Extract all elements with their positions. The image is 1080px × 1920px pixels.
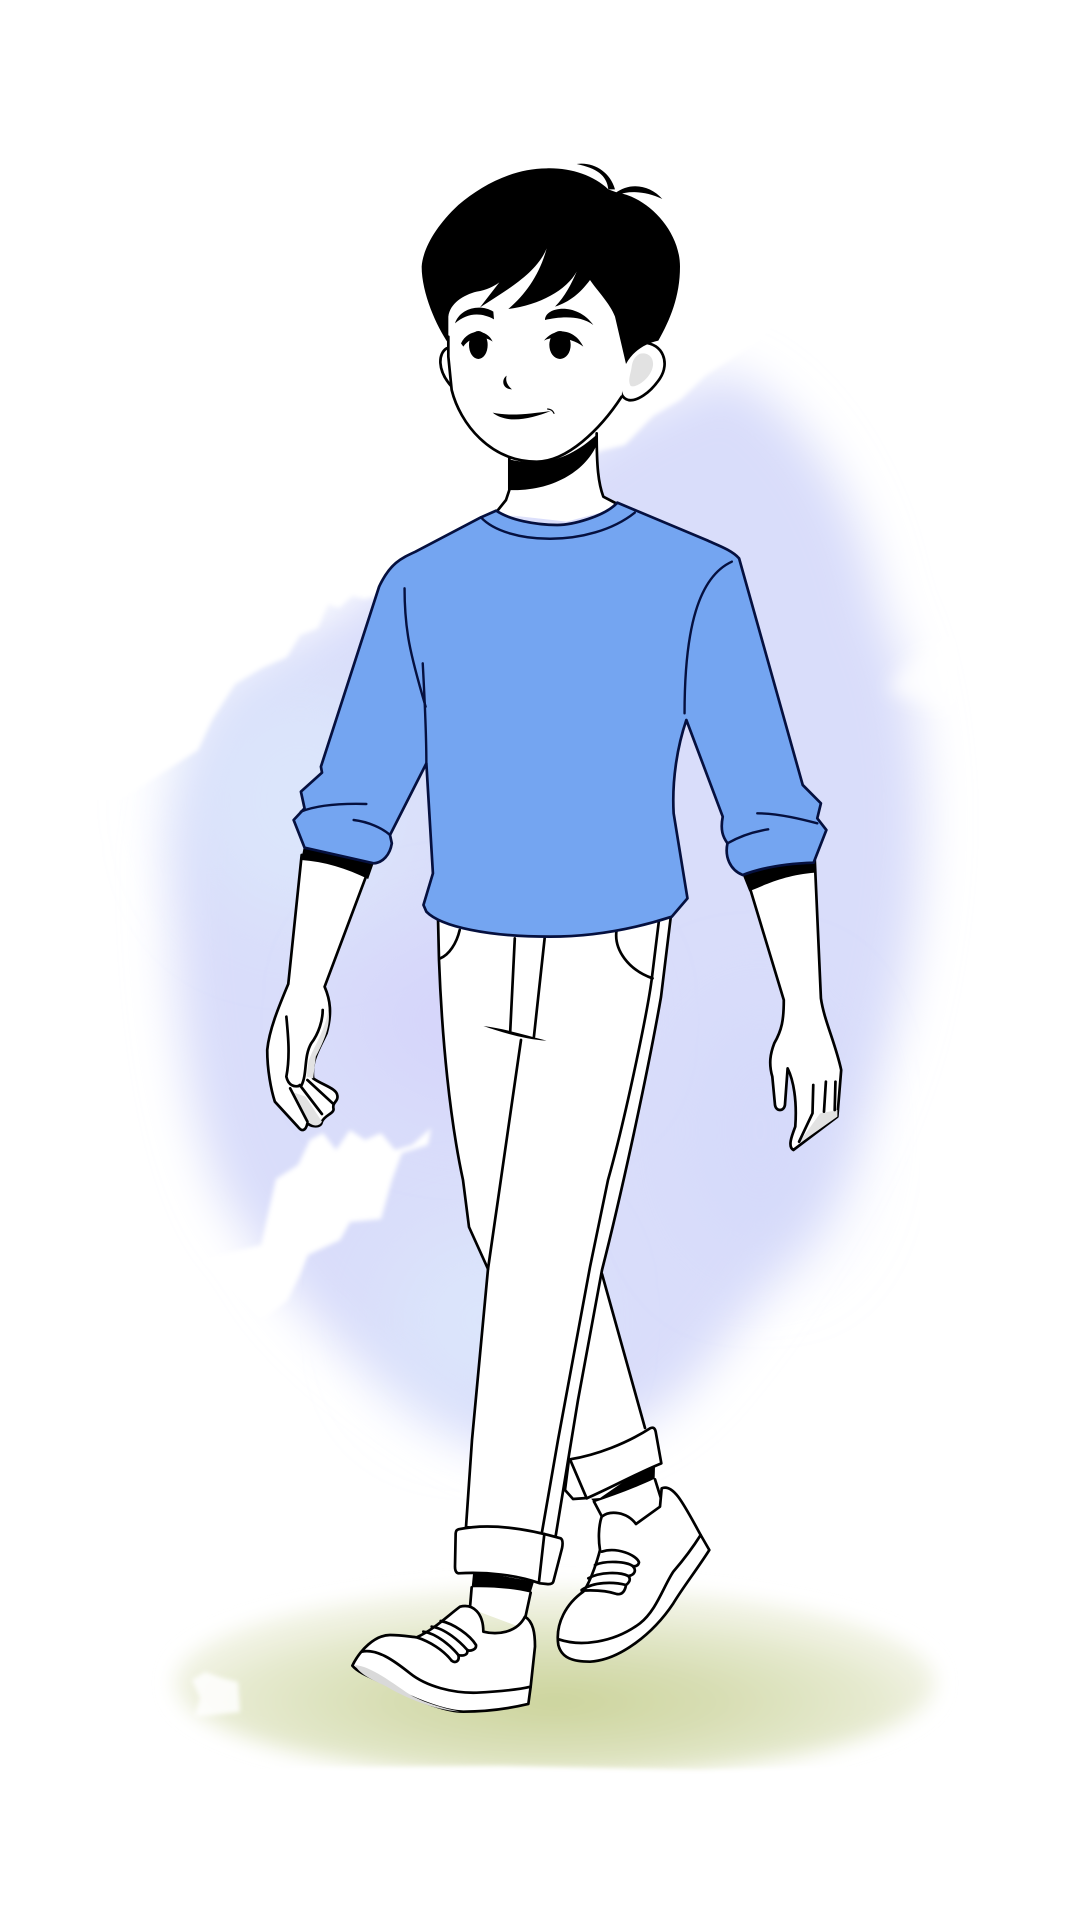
front shoe [352,1606,535,1712]
back pant cuff [570,1428,661,1498]
neck shadow [509,434,597,490]
blue sweater [294,503,826,937]
background: blue watercolor blob [0,0,1080,1452]
back ankle [587,1473,662,1520]
front leg: ankle, shoe, sock [352,1571,535,1712]
front pant cuff [455,1526,563,1584]
right ear [621,343,665,400]
left ear [440,348,452,387]
head [422,164,680,490]
front sock [472,1571,534,1593]
sleeve seams [405,588,426,707]
back sock [588,1467,655,1502]
right side torn notch [888,620,960,715]
nose [503,376,512,389]
sleeve folds [301,804,366,812]
eyebrows [455,308,593,325]
ground: olive watercolor shadow [120,1589,960,1840]
neck [493,430,623,522]
back shoe [558,1488,709,1662]
lower-left torn streak [200,1128,431,1320]
collar [481,513,635,539]
trousers: main body [438,915,671,1540]
left black cuff [301,848,374,879]
left arm and hand [267,855,372,1130]
back leg: ankle, shoe, sock [558,1467,709,1662]
pockets and fly [440,930,653,1041]
back lower pant leg [565,1274,655,1500]
hair [422,164,680,364]
face [448,273,627,462]
upper-left torn edge [0,0,1080,800]
eyes [461,331,583,359]
mouth [493,409,554,419]
sweater body with sleeves [294,503,826,937]
right black cuff [743,862,815,891]
right arm and hand [744,860,841,1150]
front ankle [470,1577,533,1628]
